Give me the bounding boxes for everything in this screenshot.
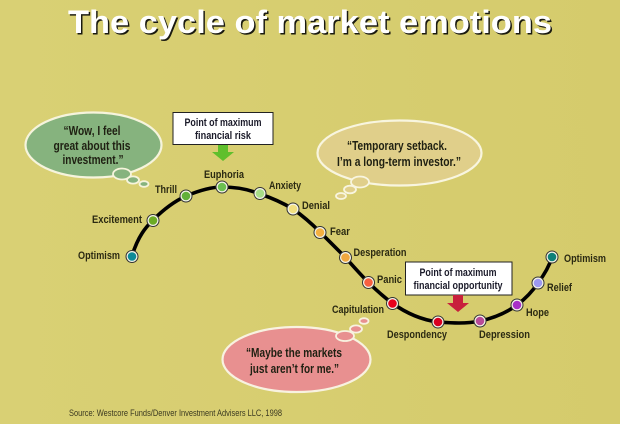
stage: despondency — [387, 316, 448, 341]
stage: depression — [474, 315, 530, 341]
callout: point of maximum financial risk: financial risk — [195, 130, 252, 142]
bubble: euphoria thought: investment.” — [62, 153, 124, 167]
stage: denial — [287, 200, 330, 215]
arrow: green down — [212, 145, 234, 161]
callout: point of maximum financial risk — [173, 112, 273, 144]
stage: thrill — [155, 184, 192, 202]
stage: hope: Hope — [526, 307, 549, 319]
callout: point of maximum financial opportunity — [406, 262, 512, 295]
bubble: maybe the markets thought — [222, 318, 370, 392]
stage: relief: Relief — [547, 282, 572, 294]
bubble: temporary setback thought: I’m a long-term investor.” — [337, 155, 461, 169]
stage: panic — [362, 274, 402, 288]
stage: optimism start: Optimism — [78, 250, 120, 262]
stage: anxiety: Anxiety — [269, 180, 302, 192]
bubble: maybe the markets thought: “Maybe the markets — [246, 346, 342, 360]
source note: Source: Westcore Funds/Denver Investment Advisers LLC, 1998 — [69, 408, 282, 418]
bubble: euphoria thought — [26, 112, 162, 187]
stage: euphoria — [204, 169, 245, 193]
stage: optimism end: Optimism — [564, 253, 606, 265]
stage: euphoria: Euphoria — [204, 169, 245, 181]
stage: desperation — [340, 247, 407, 264]
stage: hope — [511, 299, 549, 319]
stage: capitulation — [332, 298, 398, 316]
stage: fear: Fear — [330, 226, 351, 238]
bubble: temporary setback thought: “Temporary setback. — [347, 139, 447, 153]
stage: panic: Panic — [377, 274, 402, 286]
stage: fear — [314, 226, 351, 238]
bubble: temporary setback thought — [318, 120, 482, 199]
stage: optimism end — [546, 251, 606, 265]
arrow: red down — [447, 295, 469, 312]
stage: desperation: Desperation — [354, 247, 407, 259]
callout: point of maximum financial opportunity: financial opportunity — [414, 280, 503, 292]
stage: despondency: Despondency — [387, 329, 448, 341]
stage: anxiety — [254, 180, 302, 200]
title: The cycle of market emotions — [70, 6, 554, 42]
bubble: maybe the markets thought: just aren’t for me.” — [249, 362, 339, 376]
stage: excitement: Excitement — [92, 214, 142, 226]
market cycle curve — [132, 187, 552, 323]
stage: depression: Depression — [479, 329, 530, 341]
callout: point of maximum financial opportunity: Point of maximum — [420, 267, 497, 279]
callout: point of maximum financial risk: Point of maximum — [184, 117, 262, 129]
title: The cycle of market emotions — [68, 4, 552, 40]
stage: capitulation: Capitulation — [332, 304, 384, 316]
stage: denial: Denial — [302, 200, 330, 212]
stage: thrill: Thrill — [155, 184, 177, 196]
bubble: euphoria thought: great about this — [54, 139, 131, 153]
stage: relief — [532, 277, 572, 294]
bubble: euphoria thought: “Wow, I feel — [64, 124, 120, 138]
